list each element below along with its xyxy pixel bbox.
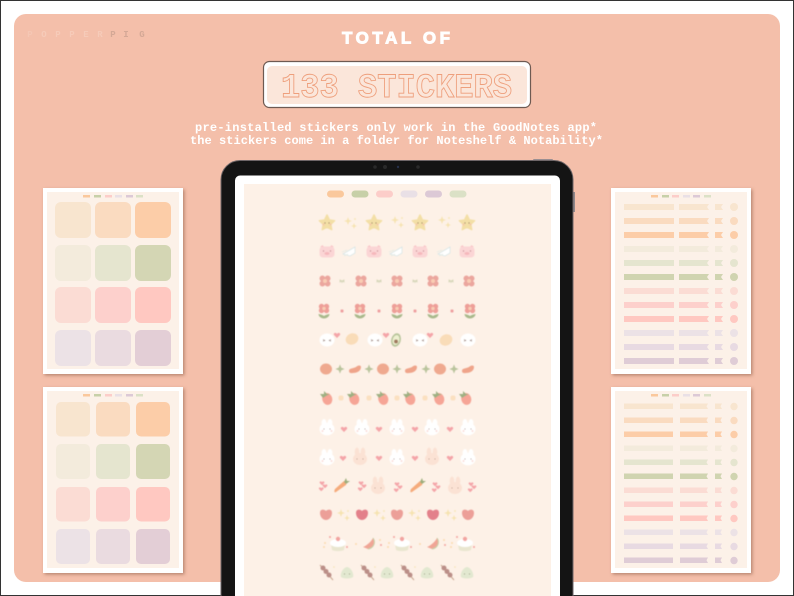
brand logo: P xyxy=(55,30,61,40)
sticker row: flowers xyxy=(320,276,474,286)
heading: total of: TOTAL OF xyxy=(342,28,450,48)
sticker row: skewers and dumplings xyxy=(320,565,473,580)
panel: colour swatch page 2 xyxy=(43,387,183,573)
brand logo xyxy=(27,30,145,40)
sticker row: cakes and watermelon xyxy=(323,536,475,551)
panel: washi bar page 2 xyxy=(611,387,751,573)
subtitle text: pre-installed stickers only work in the GoodNotes app* xyxy=(195,121,597,135)
sticker row: pigs and comets xyxy=(320,245,474,258)
brand logo: P xyxy=(110,30,116,40)
sticker row: oranges xyxy=(320,364,474,374)
brand logo: O xyxy=(41,30,47,40)
brand logo: P xyxy=(27,30,33,40)
sticker row: beans xyxy=(320,509,474,521)
panel: colour swatch page 1 xyxy=(43,188,183,374)
sticker row: stars xyxy=(319,215,475,230)
sticker row: strawberries xyxy=(320,391,473,406)
sticker row: stem flowers xyxy=(318,304,476,318)
brand logo: P xyxy=(69,30,75,40)
brand logo: E xyxy=(83,30,89,40)
sticker grid xyxy=(318,215,476,580)
brand logo: R xyxy=(97,30,103,40)
subtitle text xyxy=(190,121,603,148)
title badge: 133 stickers: 133 STICKERS xyxy=(281,70,512,108)
brand logo: I xyxy=(123,30,129,40)
sticker row: carrots and bunnies xyxy=(319,476,476,494)
tab pills xyxy=(327,190,466,198)
sticker row: buns and fruit xyxy=(320,331,476,348)
panel: washi bar page 1 xyxy=(611,188,751,374)
tablet device xyxy=(221,159,575,596)
sticker row: white bunnies xyxy=(320,419,476,435)
subtitle text: the stickers come in a folder for Noteshelf & Notability* xyxy=(190,134,603,148)
sticker row: mixed bunnies xyxy=(320,448,476,465)
brand logo: G xyxy=(139,30,145,40)
